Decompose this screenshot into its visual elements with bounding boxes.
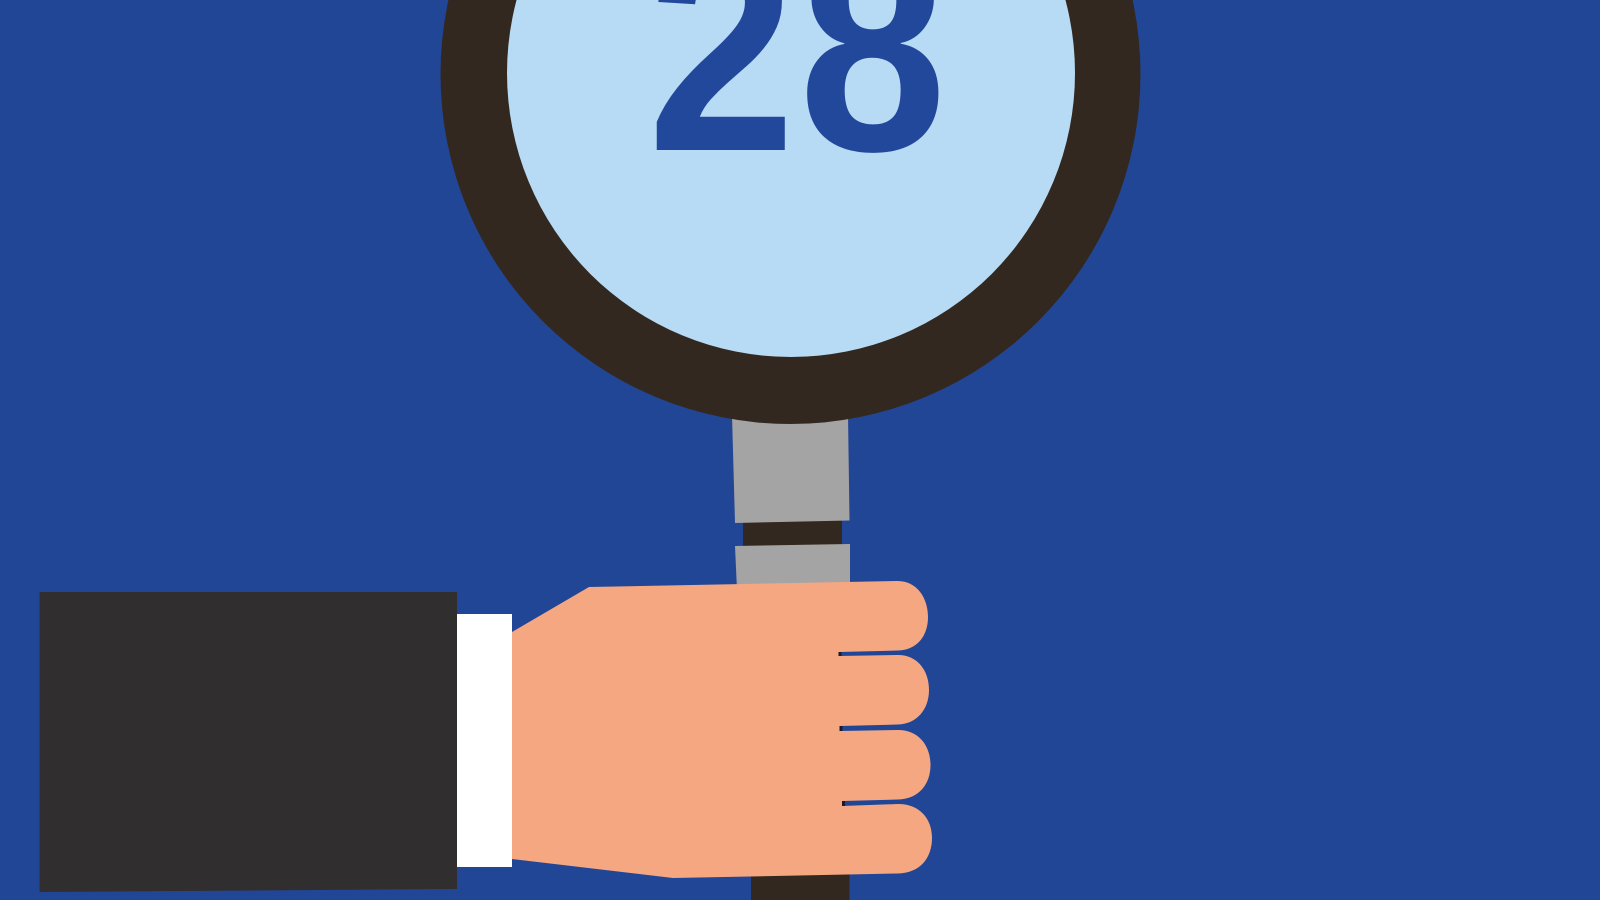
magnifier handle lower shaft xyxy=(751,860,850,900)
jacket sleeve xyxy=(40,592,457,892)
hand with fingers xyxy=(512,581,932,878)
magnifier lens xyxy=(507,0,1075,357)
icon: hand holding magnifier xyxy=(40,581,932,892)
magnifier handle dark band xyxy=(743,518,842,548)
magnifier handle upper collar xyxy=(732,415,850,523)
shirt cuff xyxy=(457,614,512,867)
icon: magnifying glass xyxy=(440,0,1140,900)
finger gap shadows xyxy=(838,652,845,806)
magnifier handle lower collar xyxy=(735,544,850,590)
magnifier ring xyxy=(440,0,1140,424)
